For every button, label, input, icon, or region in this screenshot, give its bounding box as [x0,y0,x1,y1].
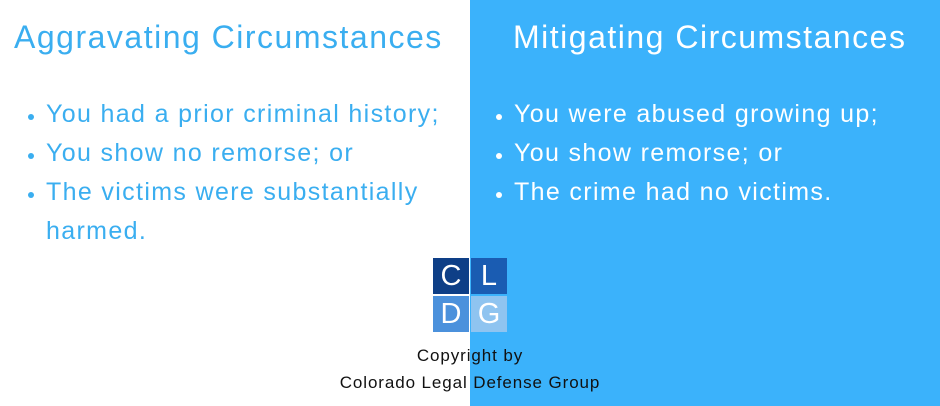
list: mitigating: You show remorse; or [514,139,783,167]
list: aggravating: You had a prior criminal history; [46,100,440,128]
list: aggravating [28,100,440,245]
copyright text [340,346,600,392]
title: aggravating: Aggravating Circumstances [14,19,443,55]
panel: mitigating background [470,0,940,406]
logo: CLDG [433,258,507,332]
list: mitigating [496,100,879,206]
title: mitigating: Mitigating Circumstances [513,19,906,55]
list: aggravating: You show no remorse; or [46,139,354,167]
copyright text: Colorado Legal Defense Group [340,373,600,392]
copyright text: Copyright by [417,346,523,365]
logo: CLDG: G [478,298,500,330]
logo: CLDG: D [441,298,461,330]
list: aggravating: The victims were substantially harmed. [46,178,419,245]
list: mitigating: The crime had no victims. [514,178,833,206]
logo: CLDG: L [481,260,497,292]
logo: CLDG: C [441,260,461,292]
list: mitigating: You were abused growing up; [514,100,879,128]
